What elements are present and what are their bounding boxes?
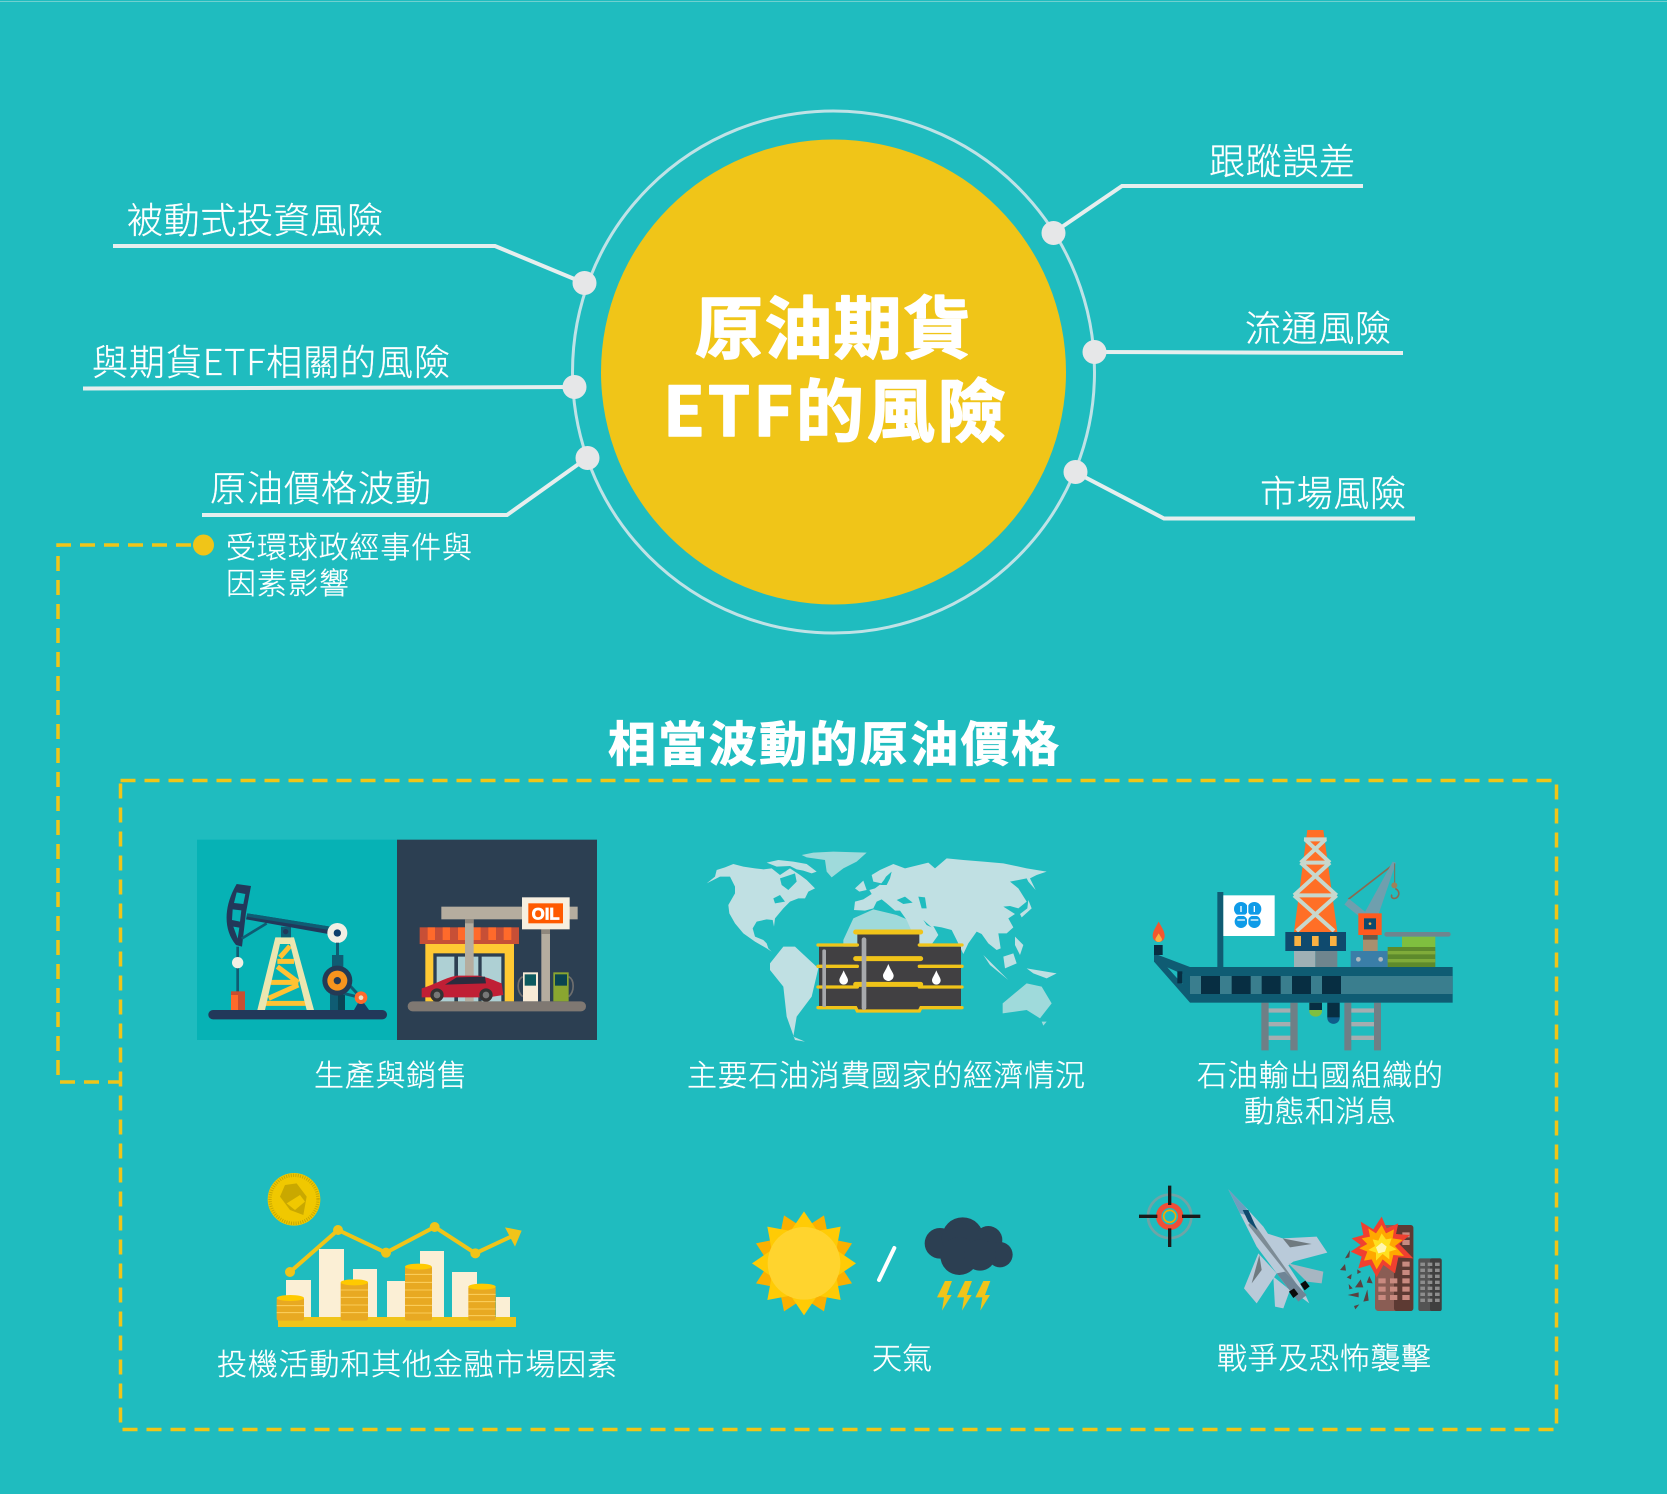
- icon: OPEC oil rig: [1153, 830, 1453, 1050]
- fighter jet: [1228, 1189, 1327, 1308]
- target: [1139, 1186, 1200, 1247]
- icon: pump jack and gas station: OIL: [532, 904, 560, 923]
- risk: market: 市場風險: [1260, 465, 1406, 517]
- dashed connector: [58, 545, 191, 1082]
- risk: market: [1064, 460, 1415, 518]
- icon: war and terrorism: [1139, 1186, 1442, 1311]
- risk: oil price volatility: [202, 446, 600, 515]
- risk: passive investment: 被動式投資風險: [127, 192, 383, 244]
- risk: passive investment: [113, 192, 596, 295]
- label: war: 戰爭及恐怖襲擊: [1217, 1334, 1431, 1378]
- label: OPEC news: 動態和消息: [1244, 1087, 1396, 1131]
- label: production and sales: 生產與銷售: [314, 1051, 467, 1095]
- note: global events: [193, 523, 472, 603]
- label: OPEC news: 石油輸出國組織的: [1197, 1051, 1443, 1095]
- risk: futures ETF: [83, 334, 586, 399]
- central circle diagram: [572, 111, 1094, 633]
- yellow central disc: [601, 140, 1066, 604]
- icon: sun and storm cloud: [752, 1211, 1013, 1315]
- main title: 原油期貨: [695, 274, 971, 373]
- icon: pump jack and gas station: [197, 840, 597, 1040]
- note: global events: 受環球政經事件與: [226, 523, 472, 567]
- note: global events: 因素影響: [226, 559, 349, 603]
- risk: oil price volatility: 原油價格波動: [210, 460, 431, 512]
- label: weather: 天氣: [872, 1334, 932, 1378]
- section heading: 相當波動的原油價格: [608, 705, 1059, 775]
- label: OPEC news: [1197, 1051, 1443, 1131]
- risk: futures ETF: 與期貨ETF相關的風險: [92, 334, 450, 386]
- outer ring: [572, 111, 1094, 633]
- world map: [707, 852, 1047, 967]
- dashed panel: [120, 780, 1556, 1430]
- main title: [663, 274, 1006, 456]
- risk: liquidity: [1082, 300, 1403, 364]
- risk: liquidity: 流通風險: [1245, 300, 1391, 352]
- label: consumer economies: 主要石油消費國家的經濟情況: [687, 1051, 1085, 1095]
- burning buildings: [1340, 1217, 1442, 1311]
- icon: financial chart with coins: [268, 1173, 522, 1327]
- label: speculation: 投機活動和其他金融市場因素: [217, 1340, 617, 1384]
- main title: ETF的風險: [663, 357, 1006, 456]
- risk: tracking error: 跟蹤誤差: [1209, 133, 1355, 185]
- icon: world map with oil barrels: [707, 852, 1057, 1042]
- oil barrels: [818, 932, 962, 1011]
- coin stacks: [277, 1264, 496, 1321]
- risk: tracking error: [1042, 133, 1363, 245]
